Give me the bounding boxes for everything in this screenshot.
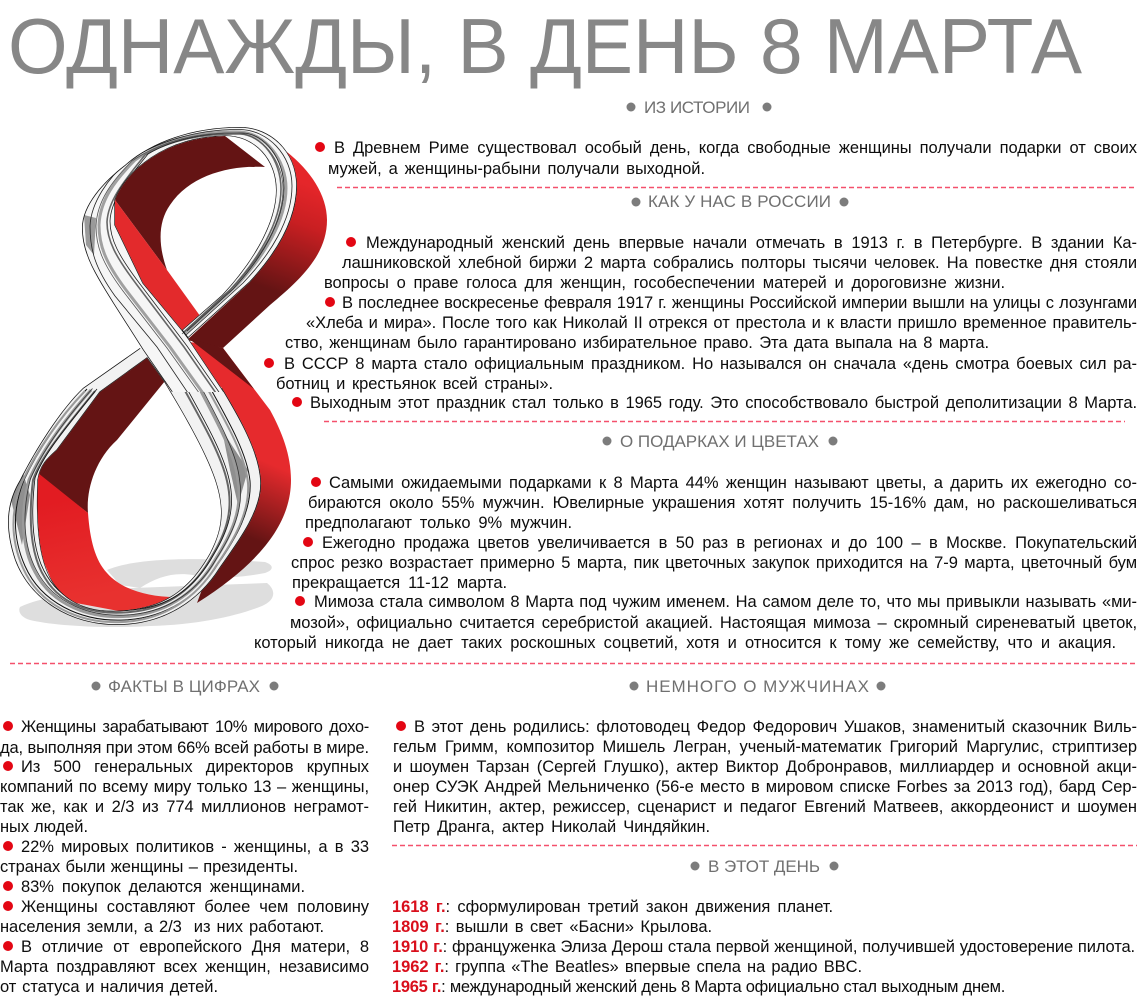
silver lower loop [8,348,261,625]
text: facts in numbers: ных людей. [0,818,88,836]
text: gifts and flowers: бираются около 55% мужчин. Ювелирные украшения хотят получить 15-16% дам, но раскошеливаться [308,494,1137,512]
text: facts in numbers: компаний по всему миру только 13 – женщины, [0,778,369,796]
text: facts in numbers: так же, как и 2/3 из 774 миллионов неграмот- [0,798,369,816]
text: on this day timeline: 1618 г.: сформулирован третий закон движения планет. [392,898,833,916]
illustration: ribbon figure eight [0,115,327,635]
right ribbon, top loop [187,152,327,348]
text: facts in numbers: населения земли, а 2/3 из них работают. [0,918,324,936]
text: facts in numbers: Женщины составляют более чем половину [21,898,369,916]
text: facts in numbers [0,718,369,996]
text: on this day timeline: 1962 г.: группа «The Beatles» впервые спела на радио BBC. [392,958,862,976]
text: history: В Древнем Риме существовал особый день, когда свободные женщины получали подарки от своих [334,139,1137,157]
text: russia: В СССР 8 марта стало официальным праздником. Но назывался он сначала «день смотра боевых сил ра- [284,355,1137,373]
text: facts in numbers: Марта поздравляют всех женщин, независимо [0,958,369,976]
heading: в этот день: В ЭТОТ ДЕНЬ [708,857,820,876]
heading: факты в цифрах: ФАКТЫ В ЦИФРАХ [108,677,260,696]
red ribbon, lower right [190,342,291,603]
text: gifts and flowers: мозой», официально считается серебристой акацией. Настоящая мимоза – скромный сиреневатый цветок, [290,614,1137,632]
heading: немного о мужчинах: НЕМНОГО О МУЖЧИНАХ [646,677,869,696]
text: gifts and flowers: прекращается 11-12 марта. [292,574,507,592]
text: russia: «Хлеба и мира». После того как Николай II отрекся от престола и к власти пришло временное правитель- [306,314,1137,332]
text: history [315,139,1137,178]
text: gifts and flowers: который никогда не дает таких роскошных соцветий, хотя и относится к тому же семейству, что и акация. [254,634,1116,652]
text: gifts and flowers: Самыми ожидаемыми подарками к 8 Марта 44% женщин называют цветы, а дарить их ежегодно со- [329,474,1137,492]
text: about men [393,718,1137,836]
text: facts in numbers: да, выполняя при этом 66% всей работы в мире. [0,739,369,757]
red strip, top loop [113,200,203,336]
dark inner ribbon, lower loop [36,353,165,513]
title: ОДНАЖДЫ, В ДЕНЬ 8 МАРТА [8,2,1082,90]
text: facts in numbers: Из 500 генеральных директоров крупных [21,758,369,776]
heading: как у нас в россии: КАК У НАС В РОССИИ [648,192,831,211]
text: facts in numbers: Женщины зарабатывают 10% мирового дохо- [21,718,369,736]
text: gifts and flowers: спрос резко возрастает примерно 5 марта, пик цветочных закупок приходится на 7-9 марта, цветочный бум [291,554,1137,572]
text: about men: онер СУЭК Андрей Мельниченко (56-е место в мировом списке Forbes за 2013 год), бард Сер- [393,778,1137,796]
text: facts in numbers: В отличие от европейского Дня матери, 8 [21,938,369,956]
text: history: мужей, а женщины-рабыни получали выходной. [328,160,705,178]
text: gifts and flowers [254,474,1137,652]
dark inner ribbon, top loop [115,136,265,270]
text: russia: В последнее воскресенье февраля 1917 г. женщины Российской империи вышли на улицы с лозунгами [342,294,1137,312]
text: on this day timeline: 1910 г.: француженка Элиза Дерош стала первой женщиной, получившей удостоверение пилота. [392,938,1135,956]
text: facts in numbers: странах были женщины – президенты. [0,858,298,876]
heading: из истории: ИЗ ИСТОРИИ [644,98,750,117]
red inner ribbon, lower loop [30,473,175,615]
text: russia: лашниковской хлебной биржи 2 марта собрались полторы тысячи человек. На повестке дня стояли [342,254,1137,272]
text: facts in numbers: 22% мировых политиков - женщины, а в 33 [21,838,369,856]
text: russia: Международный женский день впервые начали отмечать в 1913 г. в Петербурге. В здании Ка- [366,234,1137,252]
text: about men: Петр Дранга, актер Николай Чиндяйкин. [393,818,710,836]
text: about men: В этот день родились: флотоводец Федор Федорович Ушаков, знаменитый сказочник Виль- [414,718,1137,736]
text: russia [264,234,1137,412]
text: russia: Выходным этот праздник стал только в 1965 году. Это способствовало быстрой деполитизации 8 Марта. [310,394,1137,412]
text: on this day timeline [392,898,1135,996]
text: gifts and flowers: Мимоза стала символом 8 Марта под чужим именем. На самом деле то, что мы привыкли называть «ми- [314,593,1137,611]
text: on this day timeline: 1965 г.: международный женский день 8 Марта официально стал выходным днем. [392,978,1005,996]
shadow under the figure [19,559,273,627]
text: facts in numbers: 83% покупок делаются женщинами. [21,878,305,896]
text: gifts and flowers: предполагают только 9% мужчин. [305,514,572,532]
dark fold at crossing [188,338,254,389]
text: about men: гей Никитин, актер, режиссер, сценарист и педагог Евгений Матвеев, аккордеонист и шоумен [393,798,1137,816]
text: russia: ство, женщинам было гарантировано избирательное право. Эта дата выпала на 8 марта. [285,334,989,352]
text: facts in numbers: от статуса и наличия детей. [0,978,218,996]
text: on this day timeline: 1809 г.: вышли в свет «Басни» Крылова. [392,918,712,936]
text: about men: гельм Гримм, композитор Мишель Легран, ученый-математик Григорий Маргулис, стриптизер [393,738,1137,756]
text: gifts and flowers: Ежегодно продажа цветов увеличивается в 50 раз в регионах и до 100 – в Москве. Покупательский [322,534,1137,552]
text: russia: ботниц и крестьянок всей страны». [276,375,553,393]
text: russia: вопросы о праве голоса для женщин, гособеспечении матерей и дороговизне жизни. [324,274,1005,292]
heading: о подарках и цветах: О ПОДАРКАХ И ЦВЕТАХ [620,432,819,451]
silver top loop and diagonal [82,127,297,392]
text: about men: и шоумен Тарзан (Сергей Глушко), актер Виктор Добронравов, миллиардер и основной акци- [393,758,1137,776]
